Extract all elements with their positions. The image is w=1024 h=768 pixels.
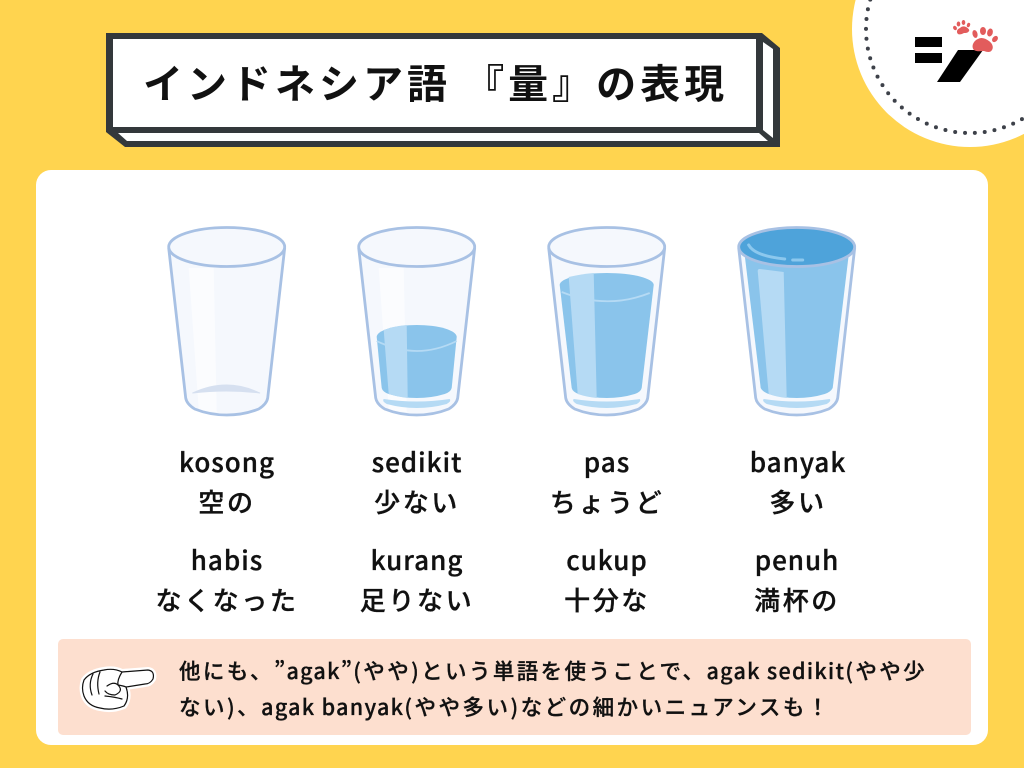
label: habis: [155, 541, 298, 618]
title text: インドネシア語 『量』の表現: [143, 52, 728, 110]
panel: main card: [36, 170, 988, 745]
icon: pointing hand: [80, 666, 156, 712]
logo badge: [852, 0, 1024, 147]
label: banyak: [750, 443, 846, 520]
label: kurang: kurang: [371, 541, 463, 578]
label: sedikit: sedikit: [372, 443, 462, 480]
label: kurang: 足りない: [360, 581, 474, 618]
label: penuh: 満杯の: [754, 581, 840, 618]
label: sedikit: 少ない: [374, 483, 460, 520]
label: cukup: 十分な: [564, 581, 650, 618]
label: pas: pas: [584, 443, 630, 480]
label: penuh: penuh: [755, 541, 839, 578]
icon: full glass: [739, 228, 855, 415]
icon: glass with just enough water: [549, 228, 665, 415]
label: kosong: kosong: [179, 443, 275, 480]
label: kurang: [360, 541, 474, 618]
callout text: ない)、agak banyak(やや多い)などの細かいニュアンスも！: [179, 691, 831, 722]
label: banyak: 多い: [769, 483, 827, 520]
title banner: [106, 33, 780, 147]
icon: empty glass: [169, 228, 285, 415]
callout text: 他にも、”agak”(やや)という単語を使うことで、agak sedikit(やや少: [179, 655, 927, 686]
icon: glass with a little water: [359, 228, 475, 415]
label: pas: ちょうど: [550, 483, 664, 520]
label: cukup: cukup: [566, 541, 648, 578]
label: sedikit: [372, 443, 462, 520]
label: banyak: banyak: [750, 443, 846, 480]
label: habis: habis: [191, 541, 263, 578]
label: cukup: [564, 541, 650, 618]
label: penuh: [754, 541, 840, 618]
callout text: [179, 655, 927, 722]
label: habis: なくなった: [155, 581, 298, 618]
label: kosong: 空の: [198, 483, 256, 520]
label: kosong: [179, 443, 275, 520]
callout: [58, 639, 971, 735]
label: pas: [550, 443, 664, 520]
